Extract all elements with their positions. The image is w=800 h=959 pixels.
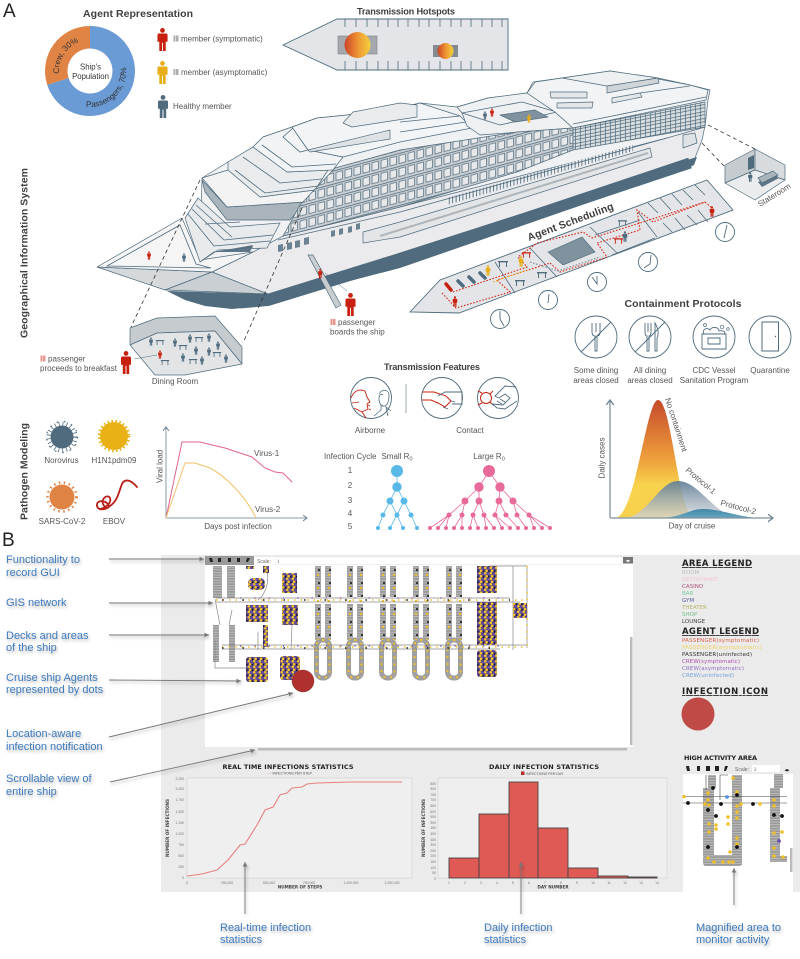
axis tick labels: 100 — [430, 866, 436, 870]
callout labels: Scrollable view of — [6, 773, 93, 785]
infection cycle labels: Infection Cycle — [324, 452, 377, 461]
curve: protocol 1 — [627, 481, 742, 518]
line chart: viral load: Virus-2 — [255, 505, 281, 514]
axis tick labels: 350 — [430, 838, 436, 842]
line chart: real time infections statistics: 1,250,000 — [384, 881, 400, 885]
callout labels: statistics — [484, 934, 527, 946]
legend: agent types: Ill member (asymptomatic) — [173, 68, 268, 77]
bar chart: daily infection statistics: 13 — [639, 881, 643, 885]
bar chart: daily infection statistics: DAILY INFECTION STATISTICS — [489, 763, 599, 771]
axis tick labels — [430, 782, 436, 881]
area chart: daily cases under containment protocols: Day of cruise — [669, 522, 716, 530]
icon: CDC vessel sanitation program: CDC Vessel — [692, 366, 736, 375]
bar chart: daily infection statistics: INFECTIONS PER DAY — [526, 772, 564, 776]
legend: agent: PASSENGER(uninfected) — [682, 652, 752, 658]
legend: agent types — [157, 28, 268, 118]
donut chart: ship's population: Ship's — [80, 62, 101, 72]
legend: infection icon — [682, 687, 768, 730]
tree diagram: small R0 — [376, 452, 419, 530]
axis tick labels: 800 — [430, 787, 436, 791]
magnified agents — [682, 776, 785, 864]
axis tick labels: 2,000 — [176, 787, 184, 791]
panel: high activity area — [682, 754, 793, 892]
icon: contact with surface — [478, 378, 518, 418]
illustration: cruise ship — [97, 71, 710, 309]
legend: area: RESTAURANT — [682, 577, 719, 583]
axis tick labels: 200 — [430, 854, 436, 858]
decks and areas of the ship — [213, 566, 462, 678]
area chart: daily cases under containment protocols — [598, 397, 773, 530]
tree diagram: small R0: Small R — [381, 452, 409, 461]
magnified deck strips — [703, 774, 787, 866]
line chart: real time infections statistics: REAL TIME INFECTIONS STATISTICS — [222, 763, 354, 771]
axis tick labels: 300 — [430, 843, 436, 847]
legend: agent: CREW(symptomatic) — [682, 659, 740, 665]
icon: airborne — [350, 378, 392, 435]
icon: CDC vessel sanitation program: Sanitation Program — [680, 376, 749, 385]
callout labels: of the ship — [6, 642, 57, 654]
area chart: daily cases under containment protocols: Protocol-1 — [684, 466, 718, 496]
legend: agent: AGENT LEGEND — [682, 627, 759, 637]
donut chart: ship's population — [45, 26, 135, 116]
axis tick labels: 1,250 — [176, 821, 184, 825]
axis tick labels: 400 — [430, 832, 436, 836]
pool deck — [457, 93, 573, 135]
heading: containment protocols: Containment Protocols — [624, 298, 742, 310]
scheduled route: asymptomatic agent — [493, 270, 527, 282]
axis tick labels: 500 — [430, 821, 436, 825]
deck plan with hotspots — [283, 19, 508, 70]
loungers — [458, 273, 485, 286]
gangway — [308, 255, 341, 308]
panel: agent scheduling deck plan — [410, 180, 733, 313]
callout labels: infection notification — [6, 741, 103, 753]
legend: agent — [682, 627, 762, 679]
line chart: viral load: Days post infection — [204, 522, 272, 531]
bow deck — [97, 218, 253, 272]
infection cycle labels: 1 — [348, 466, 353, 475]
axis tick labels: 700 — [430, 798, 436, 802]
axis tick labels: 1,750 — [176, 798, 184, 802]
callout: ill passenger proceeds to breakfast — [40, 351, 131, 374]
axis tick labels: 550 — [430, 815, 436, 819]
axis tick labels: 0 — [434, 877, 436, 881]
area chart: daily cases under containment protocols: Daily cases — [598, 438, 606, 478]
callout labels: monitor activity — [696, 934, 770, 946]
scheduled route: return — [453, 202, 705, 292]
toolbar: ◂▸ — [626, 558, 631, 563]
icon: some dining areas closed: Some dining — [574, 366, 618, 375]
legend: area: ROOM — [682, 570, 699, 576]
callout labels: Real-time infection — [220, 922, 311, 934]
icon: contact handshake: Contact — [456, 426, 485, 435]
panel: transmission hotspots — [283, 6, 508, 70]
bow lower facets — [97, 267, 212, 290]
axis tick labels: 750 — [430, 793, 436, 797]
icon: contact handshake — [422, 378, 485, 435]
callout labels: record GUI — [6, 567, 60, 579]
axis tick labels: 50 — [432, 871, 436, 875]
stern service doors — [683, 133, 697, 148]
axis tick labels: 500 — [178, 854, 184, 858]
legend: agent: CREW(asymptomatic) — [682, 666, 744, 672]
axis tick labels: 250 — [178, 865, 184, 869]
heading: agent representation: Agent Representation — [83, 8, 193, 20]
stern upper structures — [527, 71, 708, 128]
virus icons — [39, 421, 137, 526]
bar chart: daily infection statistics: 10 — [591, 881, 595, 885]
panel: high activity area: HIGH ACTIVITY AREA — [684, 754, 757, 762]
callout labels: represented by dots — [6, 684, 104, 696]
callout labels: Cruise ship Agents — [6, 672, 98, 684]
line chart: real time infections statistics: 750,000 — [303, 881, 315, 885]
bar chart: daily infection statistics: DAY NUMBER — [537, 884, 569, 890]
line chart: viral load: Viral load — [156, 450, 164, 483]
stateroom — [725, 149, 793, 209]
roof and funnels — [292, 103, 472, 157]
legend: agent types: Ill member (symptomatic) — [173, 34, 263, 44]
infection cycle labels — [324, 452, 377, 531]
rotated heading: geographical information system: Geographical Information System — [18, 168, 30, 338]
axis tick labels: 1,500 — [176, 810, 184, 814]
scheduled route: symptomatic agent — [442, 202, 712, 308]
icon: some dining areas closed — [573, 316, 619, 385]
line chart: real time infections statistics: 250,000 — [221, 881, 233, 885]
panel: GUI background — [161, 555, 800, 892]
axis tick labels: 150 — [430, 860, 436, 864]
axis tick labels: 750 — [178, 843, 184, 847]
toolbar: Scale: — [257, 559, 271, 565]
infection cycle labels: 3 — [348, 496, 353, 505]
legend: area: CASINO — [682, 584, 704, 590]
legend: agent: PASSENGER(symptomatic) — [682, 638, 759, 644]
legend: area: SHOP — [682, 612, 698, 618]
legend: agent types: Healthy member — [173, 102, 232, 111]
panel: high activity area: 2 — [754, 768, 757, 773]
icon: quarantine door: Quarantine — [750, 366, 790, 375]
tree diagram: large R0 — [428, 452, 552, 530]
callout labels — [6, 554, 781, 946]
callout labels: Location-aware — [6, 728, 81, 740]
icon: quarantine door — [749, 316, 791, 375]
axis tick labels: 650 — [430, 804, 436, 808]
callout labels: Daily infection — [484, 922, 552, 934]
scheduled route: healthy agent — [530, 257, 600, 271]
tree diagram: large R0: Large R — [473, 452, 502, 461]
bar chart: daily infection statistics: NUMBER OF INFECTIONS — [421, 799, 426, 857]
superstructure body — [200, 71, 710, 262]
tree diagram: small R0: 0 — [409, 456, 413, 462]
icon: norovirus: Norovirus — [44, 456, 79, 465]
line chart: real time infections statistics: 1,000,000 — [343, 881, 359, 885]
axis tick labels: 250 — [430, 849, 436, 853]
cabin windows — [278, 102, 705, 240]
panel: high activity area: Scale: — [735, 767, 749, 773]
donut chart: ship's population: Passengers, 70% — [86, 68, 126, 107]
dashed projection lines — [131, 125, 755, 343]
callout: ill passenger proceeds to breakfast: Ill passenger — [40, 354, 86, 364]
bar chart: daily infection statistics: 3 — [480, 881, 482, 885]
legend: agent: CREW(uninfected) — [682, 673, 734, 679]
bar chart: daily infection statistics: 5 — [512, 881, 514, 885]
dining agents and tables — [149, 333, 228, 365]
curve: protocol 2 — [663, 509, 757, 518]
panel label: A: A — [3, 1, 16, 22]
callout: ill passenger proceeds to breakfast: proceeds to breakfast — [40, 364, 118, 373]
hull side — [212, 126, 705, 294]
line chart: real time infections statistics: — INFECTIONS PER STEP — [268, 772, 313, 776]
bar chart: daily infection statistics: 9 — [576, 881, 578, 885]
bar chart: daily infection statistics: 7 — [544, 881, 546, 885]
axis tick labels: 450 — [430, 826, 436, 830]
icon: SARS-CoV-2: SARS-CoV-2 — [39, 517, 86, 526]
bar chart: daily infection statistics: 8 — [560, 881, 562, 885]
callout labels: GIS network — [6, 597, 67, 609]
icon: airborne: Airborne — [355, 426, 386, 435]
heading: transmission features: Transmission Features — [384, 362, 480, 372]
dining room: Dining Room — [152, 377, 198, 386]
callout labels: Magnified area to — [696, 922, 781, 934]
agent clusters represented by dots — [246, 566, 527, 682]
callout labels: Functionality to — [6, 554, 80, 566]
axes — [609, 400, 611, 518]
legend: agent: PASSENGER(asymptomatic) — [682, 645, 762, 651]
line chart: real time infections statistics: NUMBER OF INFECTIONS — [165, 799, 170, 857]
bar chart: daily infection statistics: 6 — [528, 881, 530, 885]
icon: all dining areas closed: All dining — [634, 366, 666, 375]
donut chart: ship's population: Crew, 30% — [53, 38, 78, 74]
bar chart: daily infection statistics: 1 — [448, 881, 450, 885]
axis tick labels: 850 — [430, 782, 436, 786]
axis tick labels: 0 — [182, 876, 184, 880]
legend: area: BAR — [682, 591, 694, 597]
promenade band — [363, 148, 652, 243]
icon: EBOV: EBOV — [103, 517, 126, 526]
bar chart: daily infection statistics: 4 — [496, 881, 498, 885]
panel: containment protocols — [573, 298, 791, 385]
toolbar — [205, 556, 633, 565]
rotated heading: pathogen modeling: Pathogen Modeling — [18, 423, 30, 520]
line chart: real time infections statistics: NUMBER OF STEPS — [278, 884, 322, 890]
callout arrows — [109, 559, 734, 914]
tables and agents on plan — [453, 206, 714, 307]
callout labels: statistics — [220, 934, 263, 946]
axis tick labels: 1,000 — [176, 832, 184, 836]
scrollbars — [630, 637, 632, 745]
divider between airborne and contact — [405, 384, 407, 413]
bar chart: daily infection statistics: 11 — [607, 881, 611, 885]
area chart: daily cases under containment protocols: Protocol-2 — [719, 498, 758, 517]
panel: transmission features — [350, 362, 518, 435]
callout: ill passenger boards the ship — [318, 269, 385, 336]
forward stepped decks — [185, 127, 343, 262]
icon: all dining areas closed — [627, 316, 673, 385]
icon: all dining areas closed: areas closed — [627, 376, 673, 385]
panel: agent representation — [45, 8, 268, 118]
donut chart: ship's population: Population — [72, 72, 109, 81]
central atrium — [548, 237, 595, 265]
line chart: viral load — [156, 427, 307, 531]
axis tick labels: 2,250 — [176, 777, 184, 781]
tender ports — [278, 223, 360, 252]
stateroom: Stateroom — [756, 181, 793, 209]
callout labels: Decks and areas — [6, 630, 89, 642]
GIS network corridors — [215, 566, 527, 668]
axis tick labels: 600 — [430, 810, 436, 814]
dining room — [130, 316, 242, 386]
clocks: agent schedule times — [490, 222, 734, 328]
callout labels: entire ship — [6, 786, 57, 798]
toolbar: 1 — [277, 560, 280, 565]
heading: transmission hotspots: Transmission Hotspots — [357, 6, 455, 16]
infection cycle labels: 4 — [348, 509, 353, 518]
legend: area: LOUNGE — [682, 619, 706, 625]
line chart: real time infections statistics: 500,000 — [263, 881, 275, 885]
hull waterline band — [167, 157, 697, 309]
panel: main GIS view — [205, 556, 633, 750]
infection notification icon on map — [292, 670, 314, 692]
legend: area: THEATER — [681, 605, 707, 611]
bar chart: daily infection statistics: 2 — [464, 881, 466, 885]
area chart: daily cases under containment protocols: No containment — [663, 397, 689, 454]
panel: high activity area: ◂▸ — [784, 768, 790, 774]
bar chart: daily infection statistics: 12 — [623, 881, 627, 885]
legend: infection icon: INFECTION ICON — [682, 687, 768, 697]
legend: area: AREA LEGEND — [682, 559, 752, 569]
bar chart: daily infection statistics: 14 — [655, 881, 659, 885]
axis tick labels — [176, 777, 184, 880]
callout: ill passenger boards the ship: Ill passenger — [330, 318, 376, 327]
legend: area: GYM — [682, 598, 694, 604]
curve: no containment — [615, 400, 695, 518]
line chart: viral load: Virus-1 — [254, 449, 280, 458]
heading: agent scheduling: Agent Scheduling — [526, 201, 615, 244]
infection cycle labels: 2 — [348, 481, 353, 490]
line chart: real time infections statistics — [165, 763, 412, 890]
icon: CDC vessel sanitation program — [680, 316, 749, 385]
agents on bow deck — [147, 251, 186, 262]
tree diagram: large R0: 0 — [502, 456, 505, 462]
icon: some dining areas closed: areas closed — [573, 376, 619, 385]
infection cycle labels: 5 — [348, 522, 353, 531]
legend: area — [681, 559, 752, 625]
line chart: real time infections statistics: 0 — [186, 881, 188, 885]
icon: H1N1pdm09: H1N1pdm09 — [92, 456, 137, 465]
bar chart: daily infection statistics — [421, 763, 667, 890]
panel label: B: B — [2, 530, 15, 551]
callout: ill passenger boards the ship: boards the ship — [330, 328, 385, 336]
